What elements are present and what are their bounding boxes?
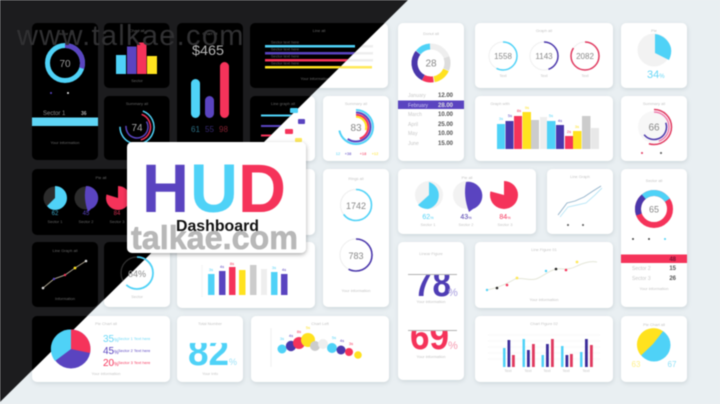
panel: dark horizontal lines: Your information bbox=[301, 76, 329, 81]
panel: dark donut sector: Sector 1 bbox=[43, 111, 66, 117]
panel: dark donut sector: 70 bbox=[59, 59, 71, 70]
panel: big percents bbox=[398, 242, 464, 380]
panel: bubble chart: 8s bbox=[297, 329, 301, 334]
panel: grouped bar chart: 2s bbox=[567, 129, 571, 134]
panel: grouped bar chart: 3s bbox=[499, 116, 503, 121]
panel: 1742 and 783 rings: 1742 bbox=[346, 201, 366, 211]
panel: dark horizontal lines bbox=[250, 23, 388, 88]
panel: rings 83: Summary all bbox=[345, 101, 367, 106]
panel: bubble chart: 4s bbox=[340, 338, 344, 343]
panel: column donut with table: February bbox=[408, 103, 429, 109]
HUD title card bbox=[127, 142, 306, 256]
panel: big percents: 78 bbox=[414, 263, 451, 305]
panel: dark 64 ring bbox=[104, 242, 151, 300]
panel: donut 65 with table: 65 bbox=[649, 204, 659, 214]
panel: three pies light: 62% bbox=[422, 214, 434, 221]
panel: big percents: Your information bbox=[417, 354, 445, 359]
HUD letters: D bbox=[238, 150, 286, 227]
panel: three progress rings: Text bbox=[581, 73, 590, 78]
panel: bar chart lower: 4s bbox=[220, 264, 224, 269]
panel: three progress rings: 1558 bbox=[494, 52, 512, 61]
panel: two-colour pie: Pie Chart all bbox=[643, 322, 665, 327]
panel: bubble chart: 3s bbox=[280, 336, 284, 341]
HUD letters: H bbox=[142, 150, 189, 227]
panel: donut 65 with table bbox=[621, 169, 687, 307]
panel: column donut with table: 12.00 bbox=[438, 93, 454, 99]
panel: dark capsule bars: $465 bbox=[192, 42, 224, 58]
panel: dark horizontal lines: Sector text here bbox=[271, 46, 300, 52]
panel: grouped bar chart: 5s bbox=[549, 113, 553, 118]
panel: dark horizontal lines: Line all bbox=[313, 28, 325, 33]
panel: column donut with table: 10.00 bbox=[438, 112, 454, 118]
value tags over the diagonal bbox=[285, 108, 305, 142]
panel: 82 percent: % bbox=[229, 357, 237, 367]
panel: column donut with table: May bbox=[408, 131, 418, 137]
panel: dark three pies bbox=[32, 168, 128, 236]
panel: dark bar chart bbox=[104, 23, 170, 88]
panel: three progress rings: 1143 bbox=[535, 52, 553, 61]
dark watermark: www.talkae.com bbox=[16, 20, 245, 52]
panel: grouped thin bars: Text bbox=[543, 368, 552, 373]
panel: 1742 and 783 rings bbox=[323, 169, 389, 307]
panel: dark horizontal lines: Sector text here bbox=[271, 54, 300, 58]
panel: dark concentric rings bbox=[104, 96, 170, 160]
panel: bar chart lower bbox=[177, 242, 315, 308]
pie legend: Sector 2 Text here bbox=[118, 348, 151, 353]
panel: column donut with table bbox=[398, 23, 464, 161]
panel: pie with list, light bbox=[32, 316, 170, 382]
panel: grouped bar chart: 8s bbox=[517, 108, 521, 113]
panel: light horizontal lines bbox=[250, 23, 388, 88]
panel: small line chart: Line Graph bbox=[570, 174, 590, 179]
panel: rings 83: +18 bbox=[360, 151, 367, 156]
panel: big percents: 69 bbox=[410, 316, 449, 358]
panel: big percents: % bbox=[448, 287, 458, 299]
panel: grouped bar chart: 5s bbox=[508, 113, 512, 118]
panel: dark line bars bbox=[250, 96, 310, 142]
panel: dark three pies: 84 bbox=[114, 211, 121, 217]
panel: column donut with table: 15.00 bbox=[438, 141, 454, 147]
panel: 34 percent pie: Pie bbox=[651, 28, 658, 33]
panel: 64 percent ring: Sector bbox=[131, 294, 143, 299]
panel: three progress rings: Graph all bbox=[536, 28, 552, 33]
panel: dark horizontal lines: Sector text here bbox=[271, 40, 300, 44]
dark half panels bbox=[32, 23, 388, 382]
panel: 1742 and 783 rings: Your information bbox=[342, 288, 370, 293]
panel: donut 65 with table: Sector 3 bbox=[632, 276, 651, 282]
panel: dark three pies: Sector 1 bbox=[48, 219, 63, 224]
panel: two-colour pie bbox=[621, 316, 687, 382]
panel: big percents: Linear Figure bbox=[419, 251, 444, 256]
panel: column donut with table: 28.00 bbox=[438, 103, 454, 109]
panel: bubble chart bbox=[251, 316, 389, 382]
panel: rings 83: 83 bbox=[350, 123, 362, 134]
panel: rings 83: +38 bbox=[345, 151, 352, 156]
panel: dark three pies: 45 bbox=[83, 211, 90, 217]
panel: bar chart lower: 8s bbox=[230, 261, 234, 266]
panel: dark capsule bars: 98 bbox=[219, 125, 228, 134]
panel: three pies light: 84% bbox=[499, 214, 511, 221]
panel: dark 64 ring: 64% bbox=[128, 269, 146, 279]
panel: column donut with table: January bbox=[408, 93, 426, 99]
panel: dark line graph: Information bbox=[55, 296, 75, 301]
panel: three progress rings: Text bbox=[499, 73, 508, 78]
HUD letters: U bbox=[190, 150, 238, 227]
panel: dark bar chart: Chart all bbox=[130, 28, 145, 33]
panel: column donut with table: 28 bbox=[425, 58, 437, 70]
panel: grouped bar chart: Graph with bbox=[490, 101, 510, 106]
panel: 64 percent ring bbox=[104, 242, 170, 307]
panel: bar chart lower: 4s bbox=[282, 267, 286, 272]
panel: 1742 and 783 rings: Rings all bbox=[348, 176, 364, 181]
panel: three pies light bbox=[398, 169, 536, 234]
panel: bubble chart: 4s bbox=[289, 333, 293, 338]
panel: dark capsule bars: 55 bbox=[205, 125, 214, 134]
donut 28 bbox=[408, 40, 454, 86]
panel: grouped bar chart: 3s bbox=[575, 124, 579, 129]
panel: dark concentric rings: 74 bbox=[131, 123, 143, 134]
panel: rings 83: 12 bbox=[336, 151, 341, 156]
pie legend: 20% bbox=[103, 358, 119, 369]
panel: dark line graph: Line Graph all bbox=[53, 248, 78, 253]
panel: three progress rings: Text bbox=[540, 73, 549, 78]
panel: donut 65 with table: 48 bbox=[669, 257, 677, 263]
panel: donut 65 with table: Sector all bbox=[646, 178, 662, 183]
pie chart bbox=[51, 329, 90, 368]
pie legend bbox=[103, 334, 151, 369]
panel: three progress rings bbox=[475, 23, 613, 88]
panel: donut 65 with table: Your information bbox=[640, 286, 668, 291]
panel: bar chart lower: 3s bbox=[272, 265, 276, 270]
panel: dark capsule bars: 61 bbox=[191, 125, 200, 134]
panel: column donut with table: June bbox=[408, 141, 419, 147]
panel: rings 66 bbox=[621, 96, 687, 161]
panel: 82 percent: Total Number bbox=[198, 321, 223, 326]
panel: hidden wide light card bbox=[177, 169, 315, 235]
panel: three progress rings: 2082 bbox=[576, 52, 594, 61]
panel: column donut with table: 10.00 bbox=[438, 131, 454, 137]
subtitle: Dashboard bbox=[176, 218, 259, 235]
panel: grouped thin bars: Text bbox=[582, 368, 591, 373]
panel: 1742 and 783 rings: 783 bbox=[348, 251, 364, 261]
panel: column donut with table: 25.00 bbox=[438, 122, 454, 128]
panel: 34 percent pie bbox=[621, 23, 687, 88]
panel: dark donut sector: Your information bbox=[51, 140, 79, 145]
panel: three pies light: 43% bbox=[460, 214, 472, 221]
panel: dark three pies: 62 bbox=[52, 211, 59, 217]
panel: rings 66: Summary all bbox=[643, 101, 665, 106]
panel: dark horizontal lines: Sector text here bbox=[271, 60, 300, 66]
panel: donut 65 with table: 15 bbox=[669, 266, 677, 272]
panel: big percents: % bbox=[448, 340, 458, 352]
watermark: talkae.com bbox=[131, 219, 298, 256]
panel: dark capsule bars bbox=[176, 22, 244, 142]
panel: donut 65 with table: 26 bbox=[669, 276, 677, 282]
panel: grouped bar chart bbox=[475, 96, 613, 161]
panel: 82 percent: Your Info bbox=[202, 371, 219, 376]
panel: big percents: Your information bbox=[417, 299, 445, 304]
panel: dark three pies: Sector 2 bbox=[79, 219, 94, 224]
panel: dark concentric rings: Summary all bbox=[126, 101, 148, 106]
panel: 34 percent pie: 34% bbox=[647, 69, 665, 81]
panel: grouped bar chart: 4s bbox=[558, 118, 562, 123]
panel: grouped thin bars: Text bbox=[562, 368, 571, 373]
panel: smooth line chart bbox=[475, 242, 613, 308]
pie legend: Sector 1 Text here bbox=[118, 336, 151, 341]
panel: pie with list, light: Your information bbox=[92, 371, 120, 376]
panel: grouped thin bars: Text bbox=[524, 368, 533, 373]
panel: 64 percent ring: 64% bbox=[128, 269, 146, 279]
table row highlight bbox=[398, 100, 464, 109]
panel: bubble chart: Chart Left bbox=[311, 321, 330, 326]
panel: rings 83 bbox=[323, 96, 389, 161]
panel: small line chart bbox=[547, 169, 613, 234]
panel: dark donut sector: 36 bbox=[81, 111, 87, 117]
panel: dark capsule bars: Chart all bbox=[203, 31, 218, 36]
panel: 82 percent bbox=[177, 316, 243, 382]
panel: dark three pies: Sector 3 bbox=[110, 219, 125, 224]
panel: two-colour pie: 67 bbox=[668, 360, 677, 369]
panel: grouped thin bars: Text bbox=[504, 368, 513, 373]
panel: bar chart lower: 3s bbox=[209, 267, 213, 272]
pie legend: 35% bbox=[103, 334, 119, 345]
panel: dark line graph bbox=[32, 242, 98, 307]
panel: dark three pies: Pie all bbox=[96, 175, 107, 180]
panel: smooth line chart: Your information bbox=[530, 297, 558, 302]
panel: rings 83: +12 bbox=[372, 151, 379, 156]
panel: dark donut sector bbox=[32, 23, 98, 160]
panel: rings 66: 66 bbox=[648, 122, 660, 134]
panel: bubble chart: 5s bbox=[332, 335, 336, 340]
panel: donut 65 with table: Sector 2 bbox=[632, 266, 651, 272]
panel: pie with list, light: Pie Chart all bbox=[95, 321, 117, 326]
pie legend: Sector 3 Text here bbox=[118, 360, 151, 365]
panel: grouped thin bars bbox=[475, 316, 613, 382]
panel: 82 percent: 82 bbox=[188, 332, 229, 374]
panel: grouped thin bars: Chart Figure 02 bbox=[530, 321, 559, 326]
panel: bubble chart: 5s bbox=[306, 325, 310, 330]
panel: three pies light: Sector 3 bbox=[498, 222, 513, 227]
panel: column donut with table: April bbox=[408, 122, 418, 128]
panel: dark pie card bbox=[32, 316, 88, 370]
panel: two-colour pie: 63 bbox=[632, 360, 641, 369]
panel: dark bar chart: Sector bbox=[131, 78, 143, 83]
panel: three pies light: Sector 1 bbox=[421, 222, 436, 227]
panel: three pies light: Pie all bbox=[462, 175, 473, 180]
panel: dark donut sector: Sector all bbox=[57, 31, 73, 36]
panel: bubble chart: 3s bbox=[349, 341, 353, 346]
panel: dark line bars: Line graph all bbox=[271, 101, 295, 106]
panel: grouped bar chart: 9s bbox=[525, 105, 529, 110]
HUD letters bbox=[142, 150, 286, 227]
dark triangle background bbox=[0, 0, 408, 402]
pie legend: 45% bbox=[103, 346, 119, 357]
panel: light line graph bbox=[250, 96, 315, 161]
panel: three pies light: Sector 2 bbox=[459, 222, 474, 227]
panel: column donut with table: Donut all bbox=[423, 31, 439, 36]
panel: smooth line chart: Line Figure 01 bbox=[531, 247, 558, 252]
panel: column donut with table: March bbox=[408, 112, 422, 118]
